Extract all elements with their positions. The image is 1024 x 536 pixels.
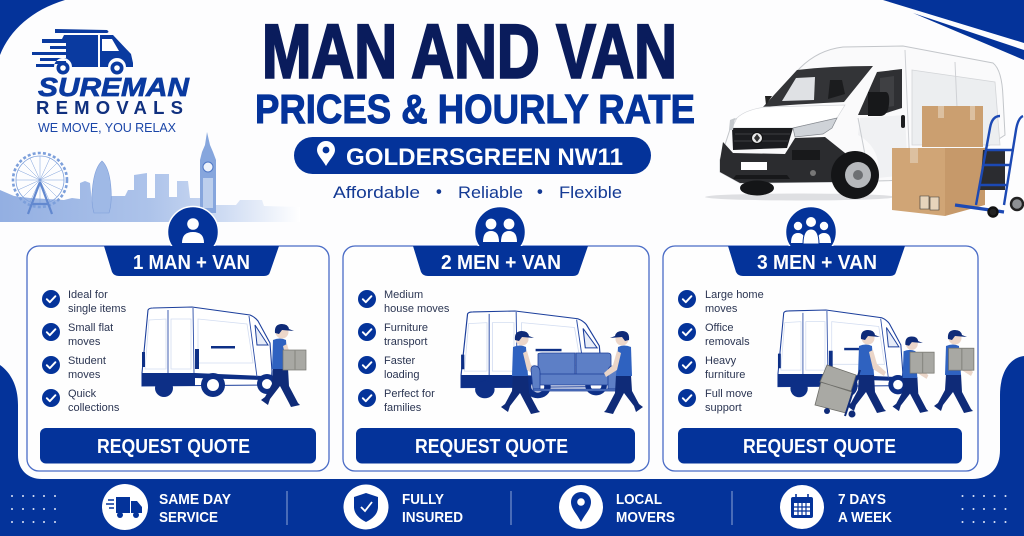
feature list: moves (705, 303, 738, 315)
location pill (294, 137, 651, 174)
footer: fully insured: FULLY (402, 491, 444, 508)
worker left (501, 331, 540, 414)
mirror (868, 92, 889, 116)
sofa (531, 353, 617, 391)
footer: seven days a week: 7 DAYS (838, 491, 886, 508)
value words: Flexible (559, 184, 622, 202)
footer: same day service (102, 484, 231, 530)
far wheel (740, 180, 774, 196)
worker right with box (934, 330, 974, 413)
side window (858, 69, 902, 115)
logo subname: REMOVALS (36, 97, 183, 118)
quote button (356, 428, 635, 464)
feature list (678, 289, 764, 414)
bumper (720, 137, 845, 183)
feature list: Faster (384, 355, 416, 367)
quote button: REQUEST QUOTE (743, 436, 896, 458)
quote button: REQUEST QUOTE (415, 436, 568, 458)
heading tab (728, 246, 905, 276)
feature list: families (384, 402, 422, 414)
card 1 (27, 206, 329, 471)
card 2 (343, 206, 649, 471)
cardboard boxes (892, 106, 985, 216)
feature list: Furniture (384, 322, 428, 334)
footer: same day service: SERVICE (159, 509, 218, 526)
icon: location pin (317, 141, 335, 166)
feature list (358, 289, 450, 414)
feature list: Office (705, 322, 734, 334)
feature list: transport (384, 336, 427, 348)
location text: GOLDERSGREEN NW11 (346, 144, 623, 171)
feature list: Quick (68, 388, 97, 400)
footer: fully insured (344, 484, 463, 530)
number plate (741, 162, 767, 170)
heading tab: 1 MAN + VAN (133, 252, 250, 274)
value words: • (537, 183, 543, 201)
feature list (42, 289, 127, 414)
feature list: house moves (384, 303, 450, 315)
feature list: Ideal for (68, 289, 108, 301)
quote button: REQUEST QUOTE (97, 436, 250, 458)
feature list: support (705, 402, 742, 414)
card 3 (663, 206, 978, 471)
heading tab: 2 MEN + VAN (441, 252, 561, 274)
heading tab (104, 246, 279, 276)
feature list: Medium (384, 289, 423, 301)
icon: logo van (32, 29, 133, 74)
door lines (858, 118, 867, 165)
van illustration (142, 307, 277, 397)
van illustration (461, 311, 607, 398)
ground shadow (705, 194, 895, 200)
heading tab: 3 MEN + VAN (757, 252, 877, 274)
London skyline (0, 132, 300, 222)
footer: seven days a week: A WEEK (838, 509, 892, 526)
top right accent stripe (913, 13, 1024, 60)
feature list: Large home (705, 289, 764, 301)
icon: delivery truck (106, 497, 142, 518)
logo (32, 29, 190, 135)
feature list: Full move (705, 388, 753, 400)
title: MAN AND VAN (262, 10, 677, 94)
van illustration (778, 310, 908, 397)
feature list: Student (68, 355, 106, 367)
icon: map pin (571, 492, 591, 522)
footer: local movers: MOVERS (616, 509, 675, 526)
footer: same day service: SAME DAY (159, 491, 231, 508)
footer: local movers: LOCAL (616, 491, 662, 508)
feature list: Small flat (68, 322, 113, 334)
icon: calendar (791, 494, 813, 518)
subtitle: PRICES & HOURLY RATE (255, 86, 695, 132)
windshield (763, 66, 873, 107)
grille (732, 128, 793, 150)
headlight (793, 118, 837, 137)
footer: local movers (559, 485, 675, 529)
van body (720, 46, 1005, 183)
feature list: single items (68, 303, 127, 315)
feature list: collections (68, 402, 120, 414)
icon: three people (786, 206, 836, 258)
value words (333, 183, 622, 202)
hero van photo (705, 46, 1005, 200)
Big Ben (200, 132, 216, 213)
Ferris wheel (13, 153, 67, 214)
feature list: loading (384, 369, 419, 381)
Gherkin (92, 161, 111, 213)
icon: two people (474, 206, 526, 258)
icon: one person (168, 206, 218, 258)
side panels (912, 70, 1000, 145)
feature list: moves (68, 369, 101, 381)
value words: • (436, 183, 442, 201)
value words: Reliable (458, 184, 523, 202)
logo name: SUREMAN (38, 72, 190, 102)
feature list: moves (68, 336, 101, 348)
quote button (40, 428, 316, 464)
front wheel (831, 151, 879, 199)
feature list: removals (705, 336, 750, 348)
worker with box (261, 324, 306, 407)
worker right (604, 331, 643, 414)
hand trolley (955, 116, 1023, 216)
feature list: Perfect for (384, 388, 435, 400)
worker middle with box (893, 337, 934, 413)
hood crease (732, 105, 845, 128)
footer: fully insured: INSURED (402, 509, 463, 526)
tagline: WE MOVE, YOU RELAX (38, 121, 177, 135)
feature list: Heavy (705, 355, 737, 367)
value words: Affordable (333, 184, 420, 202)
heading tab (413, 246, 588, 276)
quote button (678, 428, 962, 464)
feature list: furniture (705, 369, 745, 381)
icon: shield (354, 493, 378, 522)
worker with trolley (815, 330, 886, 418)
footer: seven days a week (780, 485, 892, 529)
